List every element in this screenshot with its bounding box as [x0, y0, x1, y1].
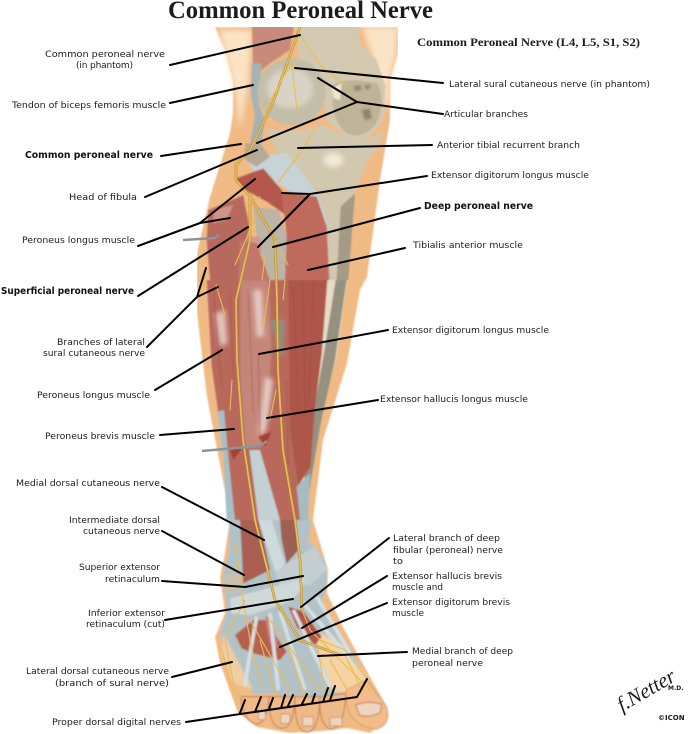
label: peroneus longus lower: Peroneus longus muscle: [37, 391, 150, 401]
superior extensor retinaculum: [275, 546, 327, 585]
muscle streaks: [214, 294, 288, 458]
label: inferior extensor retinaculum: [86, 609, 165, 630]
inferior extensor retinaculum: [230, 578, 305, 615]
cut muscle stub: [246, 236, 262, 252]
central tendon: [258, 520, 285, 575]
foot tendons: [245, 597, 357, 690]
labels: right column: [380, 80, 650, 669]
label: intermediate dorsal cutaneous: Intermediate dorsal: [69, 516, 160, 526]
label: lateral branch of deep fibular: [393, 534, 503, 567]
tibia head: [267, 125, 384, 280]
label: branches of lateral sural: Branches of lateral: [57, 338, 145, 348]
central light muscle: [240, 280, 272, 447]
label: common peroneal nerve in phantom: [45, 50, 165, 71]
label: tibialis anterior: Tibialis anterior muscle: [412, 241, 523, 251]
nerve branches: [202, 35, 370, 700]
label: superior extensor retinaculum: [79, 563, 160, 585]
femur: [297, 20, 386, 141]
label: proper dorsal digital: Proper dorsal digital nerves: [52, 718, 181, 728]
fan of white-blue fascia: [243, 153, 328, 227]
label: medial branch of deep peroneal: peroneal nerve: [412, 659, 483, 669]
extensor digitorum brevis: [235, 620, 287, 660]
label: superficial peroneal nerve: Superficial peroneal nerve: [1, 286, 134, 297]
label: extensor hallucis brevis: [392, 572, 502, 593]
panel: shin region: [207, 280, 347, 520]
subtitle: nerve roots: Common Peroneal Nerve (L4, L5, S1, S2): [417, 37, 640, 49]
label: deep peroneal nerve: Deep peroneal nerve: [424, 201, 533, 212]
label: common peroneal nerve in phantom: (in phantom): [76, 61, 133, 71]
lesser toes: [241, 693, 346, 732]
label: intermediate dorsal cutaneous: [69, 516, 160, 537]
big toe nail: [356, 702, 382, 716]
signature: Netter: ©ICON: [658, 714, 685, 722]
label: branches of lateral sural: [43, 338, 145, 359]
label: biceps tendon: Tendon of biceps femoris muscle: [11, 101, 166, 111]
leader lines: [138, 35, 443, 722]
panel: knee region: [207, 20, 386, 280]
label: lateral dorsal cutaneous: (branch of sural nerve): [55, 679, 169, 689]
grey fascia strip: [253, 207, 287, 280]
label: medial branch of deep peroneal: Medial branch of deep: [412, 647, 513, 657]
label: head of fibula: Head of fibula: [69, 193, 137, 203]
label: intermediate dorsal cutaneous: cutaneous nerve: [83, 527, 160, 537]
label: extensor hallucis brevis: Extensor hallucis brevis: [392, 572, 502, 582]
head of fibula: [245, 143, 270, 167]
extensor hallucis brevis: [288, 607, 322, 645]
central muscle: [238, 240, 270, 280]
deep grey tissue: [270, 320, 285, 357]
signature: Netter: M.D.: [668, 685, 684, 692]
label: extensor digitorum brevis: muscle: [392, 609, 424, 619]
leg skin silhouette: [197, 27, 398, 733]
label: medial dorsal cutaneous: Medial dorsal cutaneous nerve: [16, 479, 160, 489]
peroneal tendon: [217, 410, 235, 520]
label: medial branch of deep peroneal: [412, 647, 513, 669]
labels: left column: [1, 50, 181, 728]
big toe: [346, 680, 388, 729]
nerves: common and superficial peroneal: [202, 27, 370, 700]
peroneus longus upper: [207, 195, 249, 280]
label: superior extensor retinaculum: retinaculum: [105, 575, 160, 585]
label: branches of lateral sural: sural cutaneous nerve: [43, 349, 145, 359]
label: lateral sural: Lateral sural cutaneous nerve (in phantom): [449, 80, 650, 90]
label: extensor digitorum brevis: [392, 598, 510, 619]
label: inferior extensor retinaculum: retinaculum (cut): [86, 620, 165, 630]
label: articular branches: Articular branches: [444, 110, 528, 120]
panel: ankle and foot: [220, 520, 388, 732]
label: peroneus brevis: Peroneus brevis muscle: [45, 432, 155, 442]
tibialis anterior right: [288, 280, 327, 485]
lighter skin highlights: [219, 27, 398, 130]
thigh muscle: [251, 27, 294, 70]
ankle base tissue: [220, 520, 367, 697]
patella surface: [333, 80, 382, 135]
tibial bone strip: [300, 279, 348, 484]
ankle muscle bellies: [240, 520, 270, 583]
illustration: leg anatomy: [183, 20, 398, 733]
label: EDL lower: Extensor digitorum longus muscle: [392, 326, 549, 336]
red retractor shadow: [230, 432, 272, 460]
label: extensor hallucis brevis: muscle and: [392, 583, 443, 593]
lateral malleolus: [224, 573, 243, 594]
retractor hooks: [183, 235, 267, 451]
biceps femoris tendon: [250, 63, 265, 143]
label: EHL: Extensor hallucis longus muscle: [380, 395, 528, 405]
highlights on muscle: [215, 290, 273, 437]
label: common peroneal nerve in phantom: Common peroneal nerve: [45, 50, 165, 60]
deep tendon right: [297, 473, 310, 520]
lateral femoral condyle: [257, 58, 326, 125]
label: EDL upper: Extensor digitorum longus muscle: [431, 171, 589, 181]
label: common peroneal nerve: Common peroneal nerve: [25, 150, 153, 161]
tibia shaft shading: [337, 193, 355, 280]
foot skin inner: [315, 630, 367, 693]
label: inferior extensor retinaculum: Inferior extensor: [88, 609, 165, 619]
extensor tendon: [249, 450, 280, 520]
bone pitting: [353, 85, 372, 120]
label: peroneus longus upper: Peroneus longus muscle: [22, 236, 135, 246]
label: lateral dorsal cutaneous: Lateral dorsal cutaneous nerve: [26, 667, 169, 677]
label: anterior tibial recurrent: Anterior tibial recurrent branch: [437, 141, 580, 151]
label: superior extensor retinaculum: Superior extensor: [79, 563, 160, 573]
lesser toe nails: [258, 712, 342, 726]
label: lateral branch of deep fibular: to: [393, 557, 404, 567]
label: lateral branch of deep fibular: Lateral branch of deep: [393, 534, 500, 544]
label: lateral dorsal cutaneous: [26, 667, 169, 689]
signature: Netter: f.Netter: [612, 663, 680, 716]
shin muscle mass: [206, 279, 312, 521]
label: extensor digitorum brevis: Extensor digitorum brevis: [392, 598, 510, 608]
tibialis anterior muscle: [282, 192, 329, 280]
extensor digitorum longus origin: [236, 168, 290, 213]
label: lateral branch of deep fibular: fibular (peroneal) nerve: [393, 546, 503, 556]
